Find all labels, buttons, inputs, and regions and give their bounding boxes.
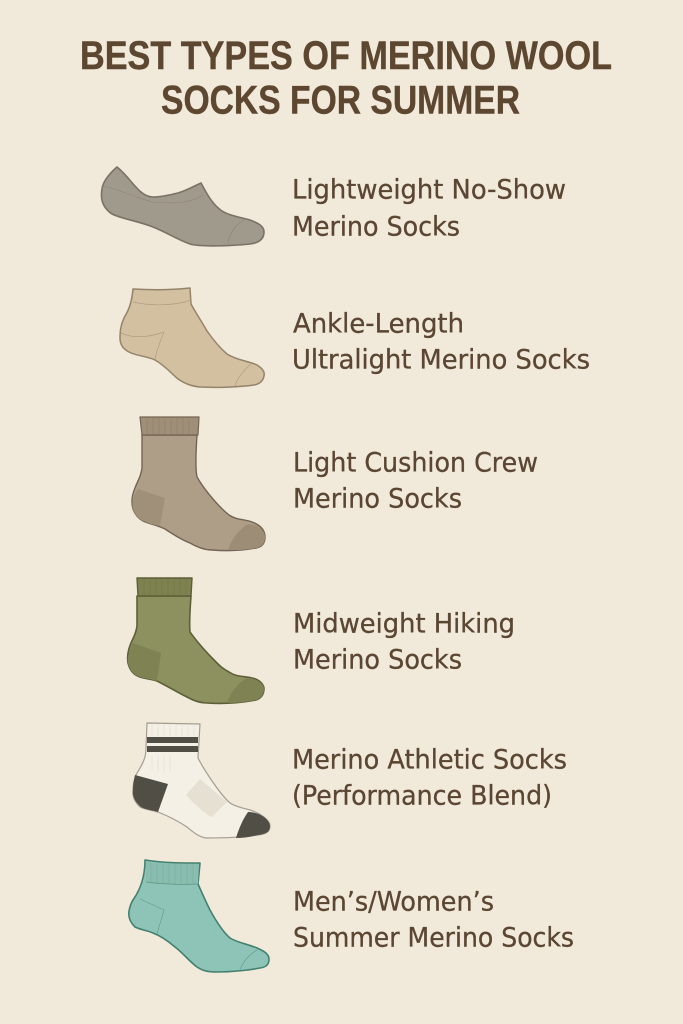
label: Men's/Women's	[293, 886, 574, 954]
title	[80, 34, 612, 122]
label: Light Cushion Crew	[293, 448, 538, 514]
sock 2: ankle, beige	[120, 288, 264, 387]
title: SOCKS FOR SUMMER	[161, 78, 520, 122]
label: Lightweight No-Show: Lightweight No-Show	[292, 174, 566, 206]
toe patch	[227, 678, 264, 703]
sock 3: light cushion crew, taupe	[132, 417, 265, 551]
heel patch	[132, 489, 165, 526]
label: Ankle-Length: Ankle-Length	[293, 308, 464, 340]
toe patch	[236, 812, 270, 838]
heel patch	[133, 775, 168, 812]
cuff	[140, 417, 199, 435]
label: Merino Athletic Socks	[292, 744, 567, 812]
label: Men's/Women's: Summer Merino Socks	[293, 922, 574, 954]
label: Merino Athletic Socks: (Performance Blend)	[292, 780, 552, 812]
label: Midweight Hiking: Merino Socks	[293, 644, 462, 676]
stripes	[147, 737, 198, 743]
cuff	[146, 862, 199, 884]
label: Midweight Hiking	[293, 608, 515, 676]
label: Lightweight No-Show	[292, 174, 566, 242]
sock 1: no-show, grey	[101, 167, 264, 246]
sock 5: athletic, white with dark accents	[133, 723, 270, 838]
label: Light Cushion Crew: Light Cushion Crew	[293, 448, 538, 478]
sock 6: men's/women's summer, teal	[129, 860, 269, 972]
label: Midweight Hiking: Midweight Hiking	[293, 608, 515, 640]
heel patch	[128, 643, 161, 681]
sock 4: midweight hiking, olive	[128, 578, 264, 703]
label: Merino Athletic Socks: Merino Athletic Socks	[292, 744, 567, 776]
mesh patch	[186, 779, 227, 817]
label: Ankle-Length	[292, 308, 590, 376]
cuff	[137, 578, 192, 596]
toe patch	[228, 524, 265, 550]
label: Ankle-Length: Ultralight Merino Socks	[292, 344, 590, 376]
label: Men's/Women's: Men’s/Women’s	[293, 886, 494, 918]
heel and toe seams	[140, 899, 164, 934]
label: Lightweight No-Show: Merino Socks	[292, 212, 460, 242]
label: Light Cushion Crew: Merino Socks	[293, 484, 462, 514]
